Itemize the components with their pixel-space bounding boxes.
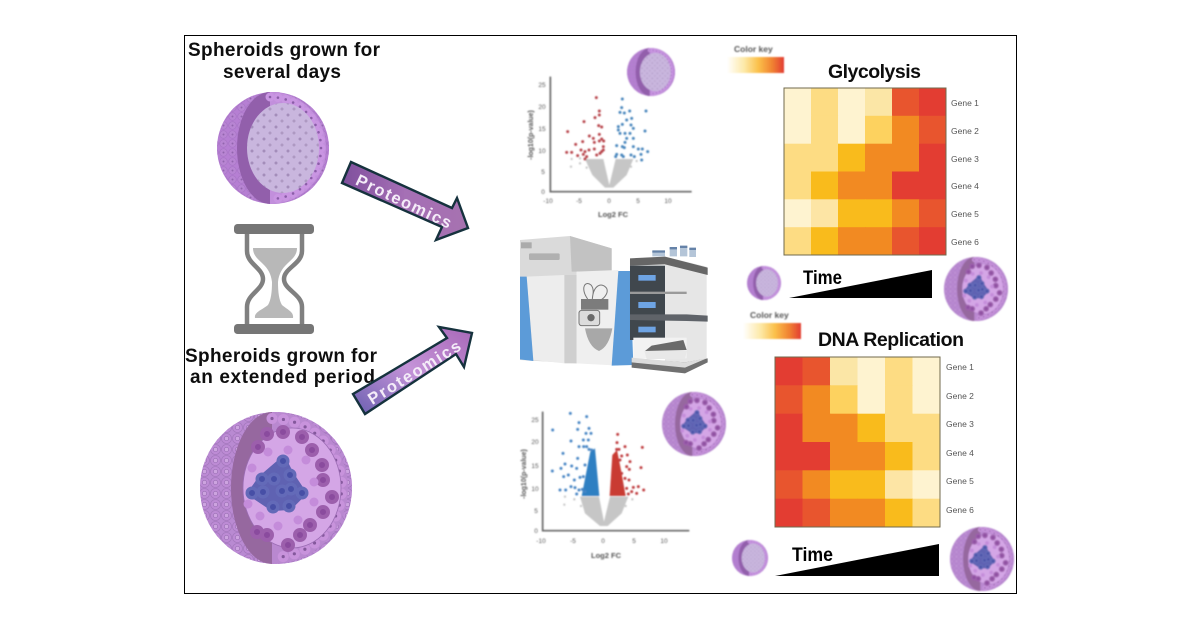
heading: spheroids grown for an extended period xyxy=(185,346,378,388)
chart: volcano plot early spheroids xyxy=(528,77,692,219)
labels: DNA replication genes: Gene 1 xyxy=(946,362,974,372)
labels: glycolysis genes: Gene 3 xyxy=(951,154,979,164)
legend: DNA replication color key: Color key xyxy=(750,310,789,320)
labels: glycolysis genes xyxy=(951,98,979,247)
legend: glycolysis color key: Color key xyxy=(734,44,773,54)
chart: volcano plot extended spheroids: -5 xyxy=(570,538,576,545)
chart: volcano plot early spheroids: -log10(p-value) xyxy=(528,110,535,160)
labels: glycolysis genes: Gene 2 xyxy=(951,126,979,136)
icon: mature spheroid glycolysis timeline xyxy=(944,257,1008,321)
legend: glycolysis color key xyxy=(727,44,784,73)
chart: volcano plot extended spheroids: 0 xyxy=(534,528,538,535)
chart: volcano plot extended spheroids: 10 xyxy=(531,486,539,493)
heading: spheroids grown for an extended period: Spheroids grown for xyxy=(185,346,378,367)
icon: mature spheroid DNA replication timeline xyxy=(950,527,1014,591)
heading: spheroids grown for an extended period: an extended period xyxy=(190,367,375,388)
heatmap: DNA replication xyxy=(775,357,940,527)
time wedge: DNA replication xyxy=(775,544,939,576)
arrow: proteomics downward: Proteomics xyxy=(353,171,454,232)
heading: spheroids grown for several days: Spheroids grown for xyxy=(188,40,381,61)
chart: volcano plot early spheroids: 10 xyxy=(538,148,546,155)
icon: young spheroid glycolysis timeline xyxy=(747,266,781,300)
chart: volcano plot extended spheroids: 0 xyxy=(601,538,605,545)
arrow: proteomics upward: Proteomics xyxy=(365,337,464,409)
icon: mature spheroid large xyxy=(200,412,352,564)
chart: volcano plot extended spheroids: 15 xyxy=(531,463,539,470)
labels: DNA replication genes: Gene 3 xyxy=(946,419,974,429)
chart: volcano plot early spheroids: 20 xyxy=(538,104,546,111)
time wedge: glycolysis: Time xyxy=(803,268,842,289)
chart: volcano plot extended spheroids: 5 xyxy=(632,538,636,545)
chart: volcano plot early spheroids: 0 xyxy=(607,198,611,205)
chart: volcano plot early spheroids: 10 xyxy=(664,198,672,205)
heading: glycolysis: Glycolysis xyxy=(828,61,921,83)
icon: hourglass xyxy=(234,224,314,334)
chart: volcano plot extended spheroids: 5 xyxy=(534,508,538,515)
chart: volcano plot early spheroids: Log2 FC xyxy=(598,210,629,219)
chart: volcano plot early spheroids: 25 xyxy=(538,82,546,89)
chart: volcano plot early spheroids: 0 xyxy=(541,189,545,196)
labels: DNA replication genes xyxy=(946,362,974,515)
heading: spheroids grown for several days: several days xyxy=(223,62,341,83)
labels: glycolysis genes: Gene 5 xyxy=(951,209,979,219)
chart: volcano plot early spheroids: 5 xyxy=(541,169,545,176)
chart: volcano plot extended spheroids: 25 xyxy=(531,417,539,424)
labels: DNA replication genes: Gene 2 xyxy=(946,391,974,401)
icon: young spheroid DNA replication timeline xyxy=(732,540,768,576)
chart: volcano plot extended spheroids xyxy=(521,412,689,560)
chart: volcano plot extended spheroids: -log10(p-value) xyxy=(521,449,528,499)
icon: young spheroid large xyxy=(217,92,329,204)
icon: young spheroid above volcano plot xyxy=(627,48,675,96)
labels: DNA replication genes: Gene 6 xyxy=(946,505,974,515)
arrow: proteomics downward xyxy=(342,162,468,240)
icon: mass spectrometer and LC instrument xyxy=(520,236,708,373)
labels: glycolysis genes: Gene 1 xyxy=(951,98,979,108)
time wedge: glycolysis xyxy=(789,268,932,298)
chart: volcano plot extended spheroids: Log2 FC xyxy=(591,551,622,560)
chart: volcano plot extended spheroids: -10 xyxy=(536,538,546,545)
heatmap: glycolysis xyxy=(784,88,946,255)
arrow: proteomics upward xyxy=(353,327,472,414)
labels: DNA replication genes: Gene 4 xyxy=(946,448,974,458)
labels: DNA replication genes: Gene 5 xyxy=(946,476,974,486)
chart: volcano plot early spheroids: -5 xyxy=(576,198,582,205)
time wedge: DNA replication: Time xyxy=(792,545,833,566)
chart: volcano plot extended spheroids: 10 xyxy=(660,538,668,545)
icon: mature spheroid beside lower volcano plot xyxy=(662,392,726,456)
labels: glycolysis genes: Gene 6 xyxy=(951,237,979,247)
heading: DNA replication: DNA Replication xyxy=(818,329,964,351)
chart: volcano plot early spheroids: -10 xyxy=(543,198,553,205)
panel: figure frame xyxy=(184,36,1016,594)
chart: volcano plot early spheroids: 5 xyxy=(636,198,640,205)
legend: DNA replication color key xyxy=(743,310,801,339)
chart: volcano plot early spheroids: 15 xyxy=(538,126,546,133)
chart: volcano plot extended spheroids: 20 xyxy=(531,439,539,446)
labels: glycolysis genes: Gene 4 xyxy=(951,181,979,191)
heading: spheroids grown for several days xyxy=(188,40,381,83)
